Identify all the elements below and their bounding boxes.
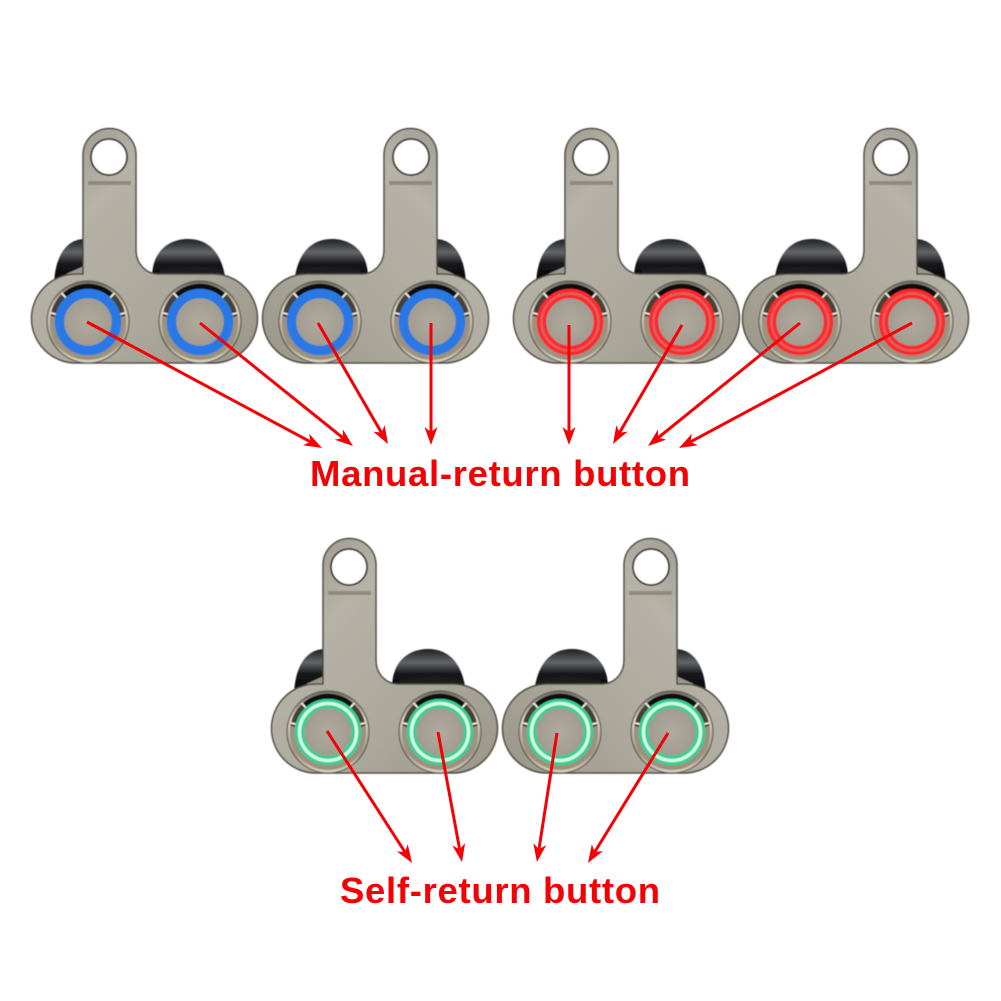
arrows: self-return [327,731,668,858]
switch: green, right mount [502,539,728,773]
label: manual-return button: Manual-return button [310,453,690,494]
switch: blue, left mount [32,129,258,363]
switch: blue, right mount [262,129,488,363]
arrows: manual-return [87,322,912,445]
switch: green, left mount [272,539,498,773]
switch: red, right mount [742,129,968,363]
label: self-return button: Self-return button [340,870,660,911]
switch: red, left mount [514,129,740,363]
